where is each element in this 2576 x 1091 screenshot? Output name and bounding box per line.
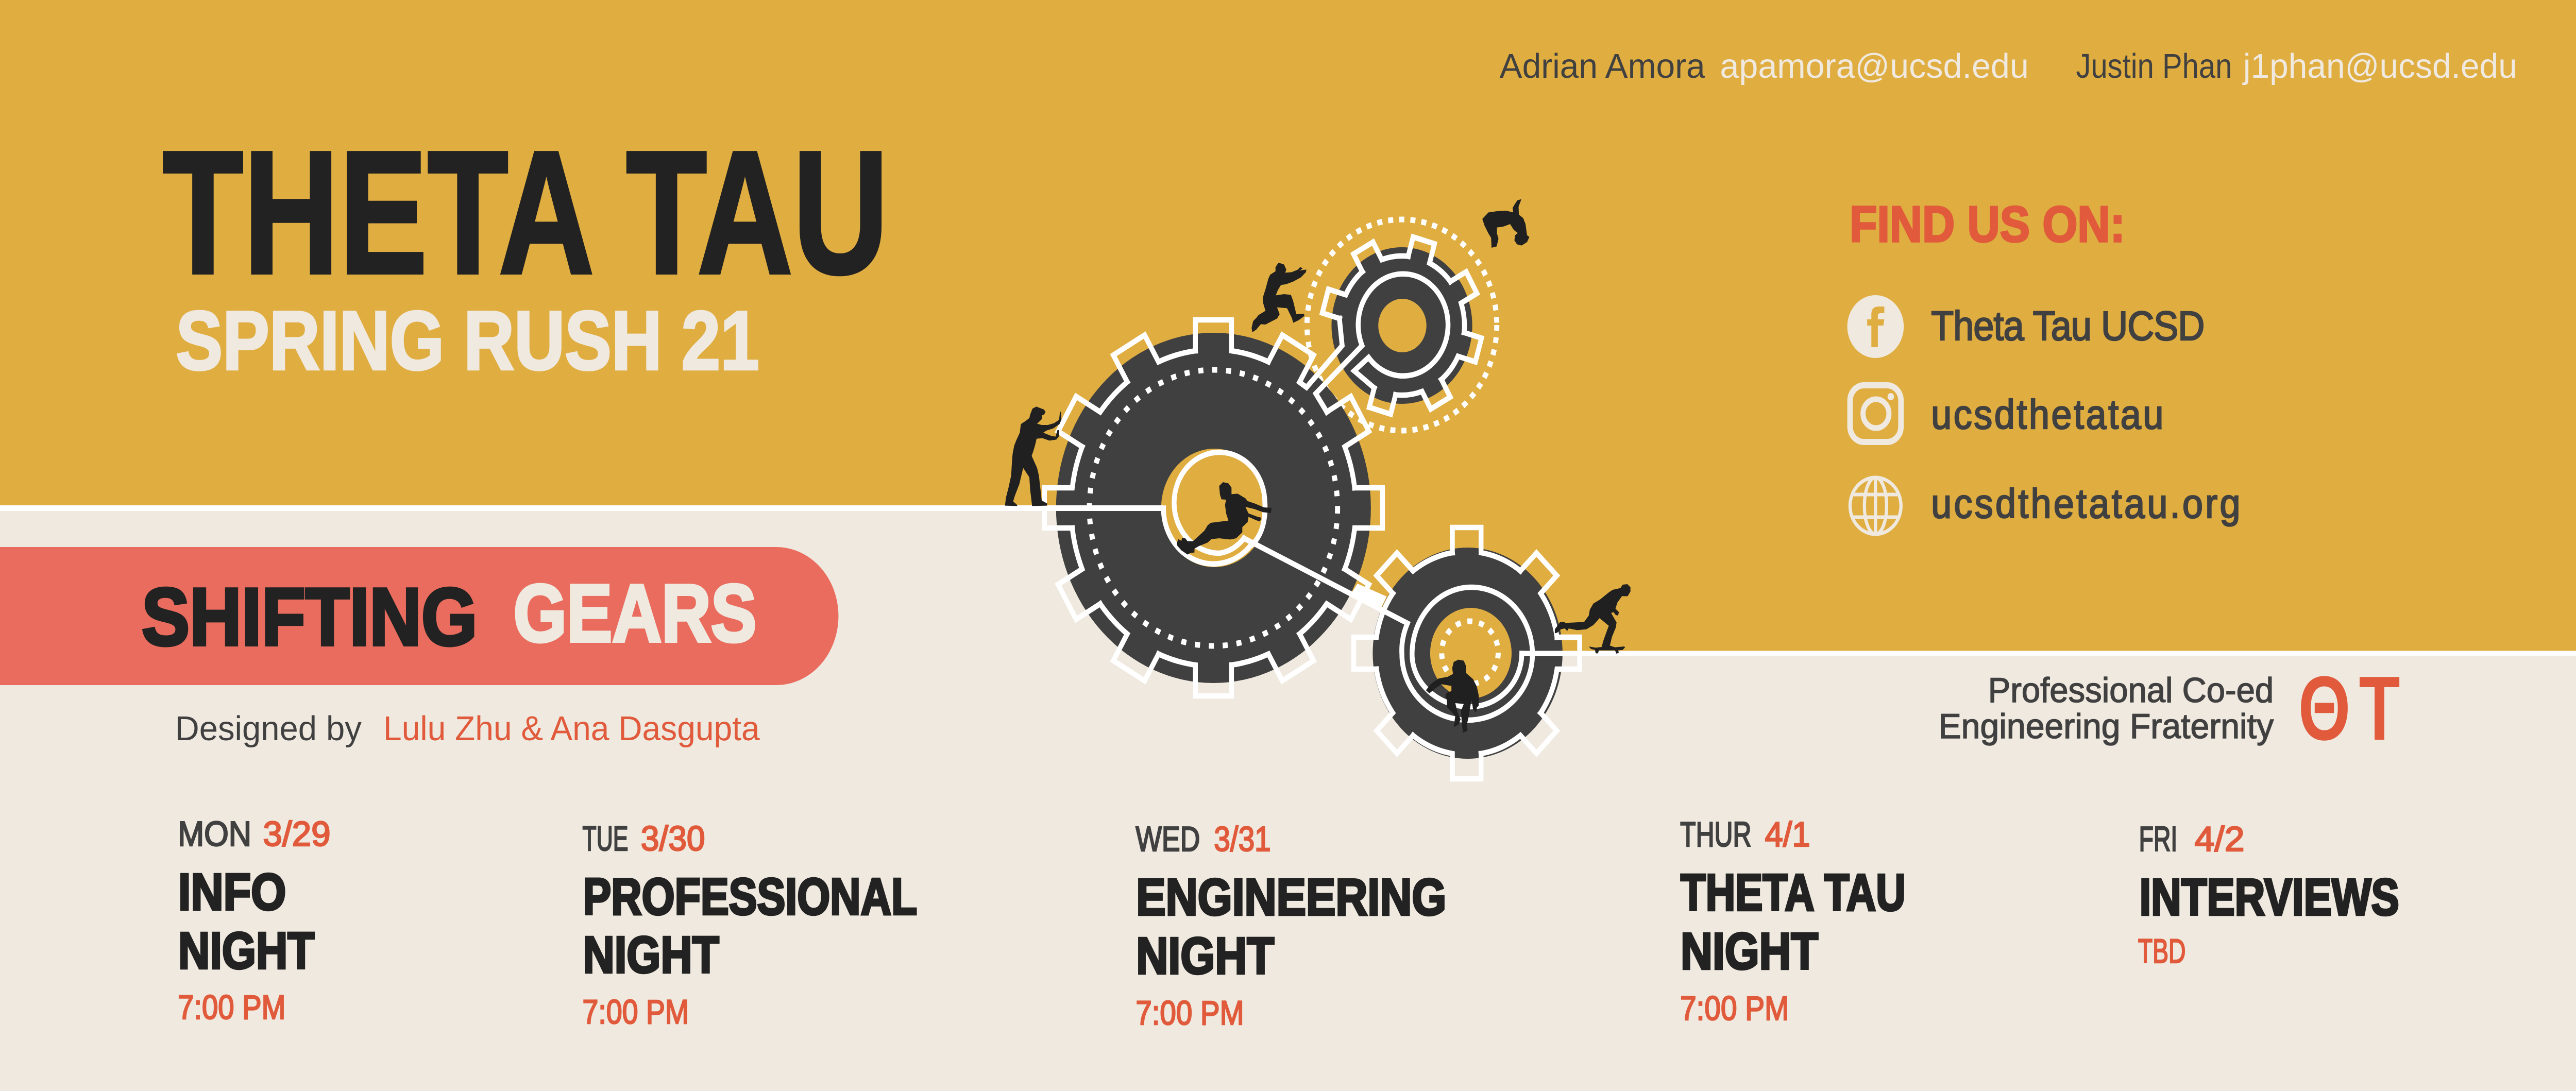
date: 4/2 [2195,819,2245,859]
tagline line two: Engineering Fraternity [1939,706,2274,746]
schedule: thursday [1680,814,1906,1028]
event line one: ENGINEERING [1136,869,1446,926]
date: 4/1 [1765,814,1810,854]
greek letter theta: Θ [2298,657,2350,759]
event line two: NIGHT [1136,928,1274,985]
date: 3/30 [641,819,705,858]
instagram name: ucsdthetatau [1931,391,2163,438]
contacts [1500,47,2517,86]
gear: lower dark disc [1372,548,1563,759]
gear connector: top gear ring joined to large gear [1299,274,1448,412]
gear outline: large [1040,315,1387,701]
fraternity tagline [1939,657,2400,759]
website address: ucsdthetatau.org [1931,481,2240,527]
icon: instagram [1850,385,1901,442]
credit names: Lulu Zhu & Ana Dasgupta [383,709,760,748]
time: 7:00 PM [582,993,689,1031]
white block between gears [1352,584,1386,608]
event line two: NIGHT [583,927,719,984]
schedule: tuesday [582,819,917,1031]
schedule: wednesday [1136,819,1446,1032]
figure: person crouching in lower gear [1426,660,1479,733]
find us on panel [1848,196,2240,534]
contact email: Adrian: apamora@ucsd.edu [1720,47,2029,86]
icon: globe [1850,478,1901,534]
schedule: monday [178,814,331,1027]
outer arc in large gear hole [1163,508,1251,564]
dotted ring around top gear [1307,219,1497,431]
event line two: NIGHT [1681,923,1818,980]
horizon line: right [1522,651,2576,656]
banner pill [0,547,838,685]
event: INTERVIEWS [2140,869,2399,926]
greek letter tau: T [2359,657,2400,759]
day: WED [1136,819,1200,859]
figure: person sliding in large gear hole [1177,482,1272,555]
inner ring of large gear hole [1174,452,1265,553]
time: TBD [2138,932,2185,970]
figure: person pushing gear [1005,406,1061,506]
banner text: shifting: SHIFTING [142,571,477,662]
contact name: Adrian: Adrian Amora [1500,47,1705,86]
event line one: PROFESSIONAL [583,868,917,926]
theme banner [0,547,838,685]
banner text: gears: GEARS [514,568,756,659]
date: 3/29 [263,814,331,854]
figure: skateboarder [1555,584,1631,654]
event line one: INFO [178,864,286,921]
day: THUR [1680,814,1752,854]
time: 7:00 PM [1136,994,1244,1032]
icon: facebook [1848,295,1904,358]
dotted ring in lower gear hole [1442,621,1498,684]
time: 7:00 PM [178,988,285,1027]
gear: top dark disc [1331,247,1472,404]
gear outline: lower [1349,522,1585,785]
tagline line one: Professional Co-ed [1988,670,2274,710]
day: MON [178,814,251,854]
background: yellow upper field [0,0,2576,653]
time: 7:00 PM [1680,990,1789,1028]
event line two: NIGHT [178,923,314,980]
day: FRI [2139,819,2177,859]
horizon line: left [0,505,1163,511]
find us heading: FIND US ON: [1850,196,2125,252]
day: TUE [582,819,628,858]
gear outline: top [1323,229,1489,422]
designer credit [175,709,760,748]
contact name: Justin: Justin Phan [2076,47,2232,86]
title: THETA TAU [162,115,888,311]
dotted ring on large gear [1089,370,1337,646]
figure: person flipping [1482,199,1529,248]
subtitle: SPRING RUSH 21 [176,294,759,387]
schedule: friday [2138,819,2399,970]
event line one: THETA TAU [1681,864,1906,922]
date: 3/31 [1214,819,1271,859]
figure: person leaping [1251,263,1307,332]
contact email: Justin: j1phan@ucsd.edu [2242,47,2517,86]
diagonal line and spiral through lower gear [1244,538,1532,720]
facebook name: Theta Tau UCSD [1931,303,2205,349]
gear: large dark disc [1056,333,1371,683]
credit label: Designed by [175,709,362,748]
